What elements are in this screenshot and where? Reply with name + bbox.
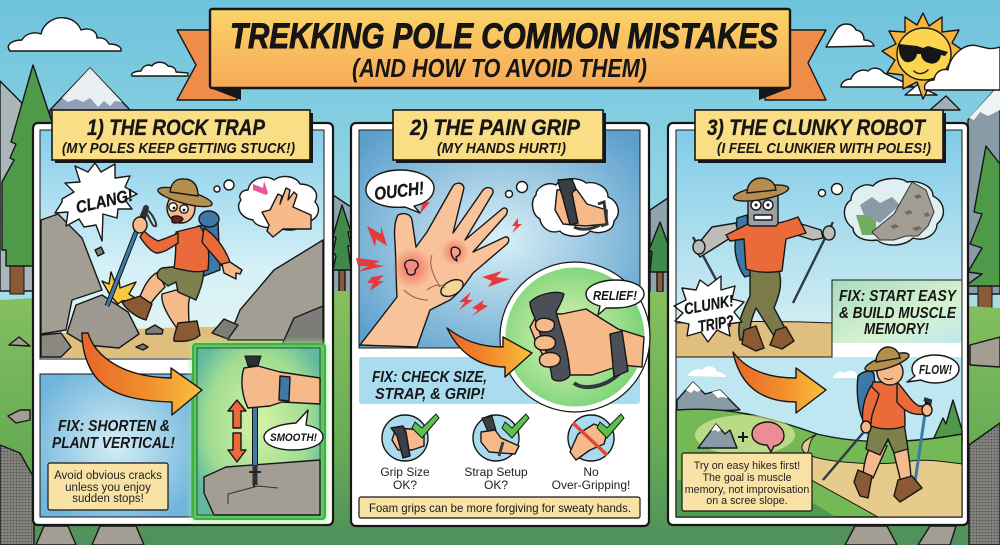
tip box: Foam grips can be more forgiving for sweaty hands.: [369, 501, 631, 515]
mountains right: [968, 84, 1000, 294]
arrow: clunky to flow: [733, 352, 826, 413]
rocks right: [970, 337, 1000, 367]
fix text box: MEMORY!: [864, 321, 930, 338]
tip box: on a scree slope.: [706, 495, 788, 507]
rock: far left: [0, 445, 34, 545]
check: no over-gripping: [552, 414, 630, 492]
sun: [882, 13, 964, 99]
hand on pole: [133, 217, 147, 233]
robot pack: [735, 215, 751, 277]
small pine between panels 2 and 3: [649, 222, 668, 272]
mountain and brain icons: [695, 415, 795, 455]
hands: [922, 404, 932, 416]
upper scene: robot: [674, 130, 962, 357]
trunk left: [10, 262, 24, 294]
trunk right: [978, 285, 992, 309]
fix text box: FIX: START EASY: [839, 288, 957, 305]
arrow: pain to fix: [447, 328, 532, 377]
speech bubble: flow: FLOW!: [919, 362, 953, 377]
up arrow: [228, 400, 246, 428]
winding trail: [802, 434, 962, 517]
ribbon tail left: [177, 30, 237, 100]
legs: [863, 440, 911, 484]
arm forward: [140, 231, 178, 253]
robot: [693, 178, 835, 351]
head: [167, 193, 195, 223]
wrist strap: [610, 331, 628, 377]
fix heading: FIX: SHORTEN &: [58, 418, 170, 435]
check: no over-gripping: Over-Gripping!: [552, 478, 630, 492]
shorts: [866, 423, 908, 455]
tip box: memory, not improvisation: [685, 484, 809, 496]
speech bubble: smooth: [264, 410, 323, 450]
panel: the pain grip: [351, 110, 650, 526]
cloud in front of sun: [925, 45, 1000, 90]
speech bubble: smooth: SMOOTH!: [270, 432, 317, 444]
tip box: [359, 497, 640, 518]
blister 1: [405, 260, 418, 275]
small stones: [95, 247, 163, 350]
upright pole: [245, 356, 261, 486]
ribbon tail right: [765, 30, 826, 100]
title card 3: (I FEEL CLUNKIER WITH POLES!): [717, 140, 931, 157]
rock: left boulder: [41, 214, 102, 334]
hiker 1: [122, 179, 242, 341]
back boot: [174, 321, 200, 341]
blister 2: [451, 247, 460, 261]
robot shirt: [726, 217, 806, 272]
banner main title: TREKKING POLE COMMON MISTAKES: [230, 17, 778, 56]
check: grip size: [380, 414, 439, 492]
speech bubble: ouch: [366, 170, 434, 213]
tip box: [682, 453, 812, 511]
fix text box: [832, 280, 962, 357]
sore glow: [391, 247, 433, 289]
robot pole right: [793, 222, 833, 303]
trunks between panels: [339, 270, 663, 292]
sound burst: clunk: [674, 276, 744, 342]
robot head: [748, 194, 778, 226]
check: strap setup: [464, 414, 529, 492]
small pine between panels 1 and 2: [333, 205, 351, 270]
hand back: [222, 262, 242, 279]
tip box: unless you enjoy: [65, 482, 151, 494]
tip box: Try on easy hikes first!: [694, 460, 800, 472]
callus: [438, 276, 466, 300]
check: strap setup: OK?: [484, 478, 508, 492]
lower scene: easy trail: [676, 347, 962, 517]
check: grip size: OK?: [393, 478, 417, 492]
robot hands: [693, 240, 705, 254]
robot boots: [742, 326, 764, 351]
head: [877, 359, 903, 385]
robot pole left: [693, 237, 720, 287]
sound burst: clunk: CLUNK!: [683, 293, 736, 318]
title card 3: [695, 110, 946, 163]
speech bubble: relief: [586, 280, 644, 315]
fingers: [534, 318, 560, 367]
pole back: [823, 433, 863, 480]
shorts: [157, 264, 204, 300]
panel: fix text area: PLANT VERTICAL!: [52, 435, 176, 452]
thought bubble: tight grip: [506, 179, 618, 236]
banner face: [210, 9, 790, 88]
rock ledge: [204, 460, 320, 515]
green hills: [676, 409, 962, 517]
hat: [156, 179, 214, 211]
hiker walking: [823, 347, 959, 502]
robot hat: [732, 178, 790, 204]
title card 2: 2) THE PAIN GRIP: [409, 115, 580, 140]
tip box: Avoid obvious cracks: [54, 470, 162, 482]
scene: hiker striking rock: [40, 130, 324, 359]
mountains centre-right: [333, 195, 668, 293]
check: grip size: Grip Size: [380, 465, 430, 479]
pain bolts: [356, 226, 510, 316]
strap: [574, 373, 620, 387]
cloud: upper left: [8, 18, 121, 51]
snowy peak left: [50, 68, 132, 127]
spark: [102, 272, 138, 304]
back leg: [162, 290, 191, 327]
title card 1: (MY POLES KEEP GETTING STUCK!): [62, 140, 295, 157]
robot legs: [739, 268, 786, 340]
check: strap setup: Strap Setup: [464, 465, 528, 479]
thought bubble: finger pinch: [214, 177, 318, 237]
fix strip: FIX: CHECK SIZE,: [372, 369, 487, 386]
panel: the clunky robot: [668, 110, 968, 525]
sound burst: clang: [55, 163, 137, 241]
arm back: [202, 228, 230, 266]
title card 1: 1) THE ROCK TRAP: [87, 115, 265, 140]
front leg: [136, 272, 165, 311]
cloud right of banner: [826, 24, 874, 47]
arms: [862, 382, 927, 424]
hand with blisters: [360, 183, 509, 347]
pine tree right: [968, 146, 1000, 286]
check: no over-gripping: No: [583, 465, 599, 479]
backpack roll: [199, 211, 219, 227]
front boot: [122, 296, 152, 320]
hat: [863, 347, 911, 375]
inner frame: [676, 130, 962, 517]
speech bubble: flow: [907, 355, 959, 383]
title card 3: 3) THE CLUNKY ROBOT: [707, 115, 926, 140]
forearm: [530, 309, 644, 375]
pebbles left: [8, 337, 30, 423]
fix text box: & BUILD MUSCLE: [839, 305, 957, 322]
rock: struck boulder: [67, 295, 139, 348]
trail ground: [41, 326, 323, 358]
thought bubble: scree slope: [818, 179, 943, 245]
title card 1: [52, 110, 313, 163]
down arrow: [228, 433, 246, 462]
panel: the rock trap: [33, 110, 333, 525]
boots: [854, 470, 872, 498]
lower clouds: [688, 366, 863, 378]
trail ground: [676, 322, 832, 357]
tip box: The goal is muscle: [702, 472, 792, 484]
trekking pole: [107, 208, 156, 306]
fix strip: STRAP, & GRIP!: [375, 386, 486, 403]
banner subtitle: (AND HOW TO AVOID THEM): [352, 53, 647, 83]
back pines: [933, 400, 962, 442]
speech bubble: relief: RELIEF!: [593, 288, 638, 303]
shirt: [174, 226, 209, 272]
arrow: problem to fix: [82, 333, 202, 415]
cloud: small left: [132, 62, 188, 76]
speech bubble: ouch: OUCH!: [373, 178, 425, 204]
mouth: [172, 216, 183, 223]
pole front: [915, 400, 927, 482]
pack: [857, 371, 878, 422]
eyes: [169, 203, 177, 211]
fix strip: [359, 357, 640, 404]
sunglasses: [899, 44, 948, 64]
hand and wrist: [242, 366, 320, 408]
rocks along bottom edge: [36, 526, 956, 545]
panel: fix text area: [40, 374, 192, 517]
fix scene: vertical plant: [191, 342, 327, 521]
clang text: CLANG!: [74, 186, 135, 217]
relief circle: [500, 262, 650, 412]
mountains left: [0, 81, 38, 291]
banner title: [177, 9, 826, 100]
pine tree left: [2, 65, 62, 266]
sound burst: clunk: TRIP?: [697, 313, 735, 336]
grass: [0, 290, 1000, 545]
scene: sore hand: [356, 130, 640, 348]
tip box: [48, 463, 168, 510]
tip box: sudden stops!: [72, 493, 144, 505]
checklist: [380, 414, 630, 492]
title card 2: (MY HANDS HURT!): [437, 140, 566, 157]
shirt: [869, 382, 905, 429]
lower mountains: [677, 382, 740, 412]
grip handle: [530, 292, 570, 381]
backpack: [198, 222, 220, 276]
cloud low right: [841, 68, 914, 87]
robot arms: [694, 222, 823, 257]
title card 2: [393, 110, 606, 163]
rock: right boulder: [228, 240, 323, 340]
